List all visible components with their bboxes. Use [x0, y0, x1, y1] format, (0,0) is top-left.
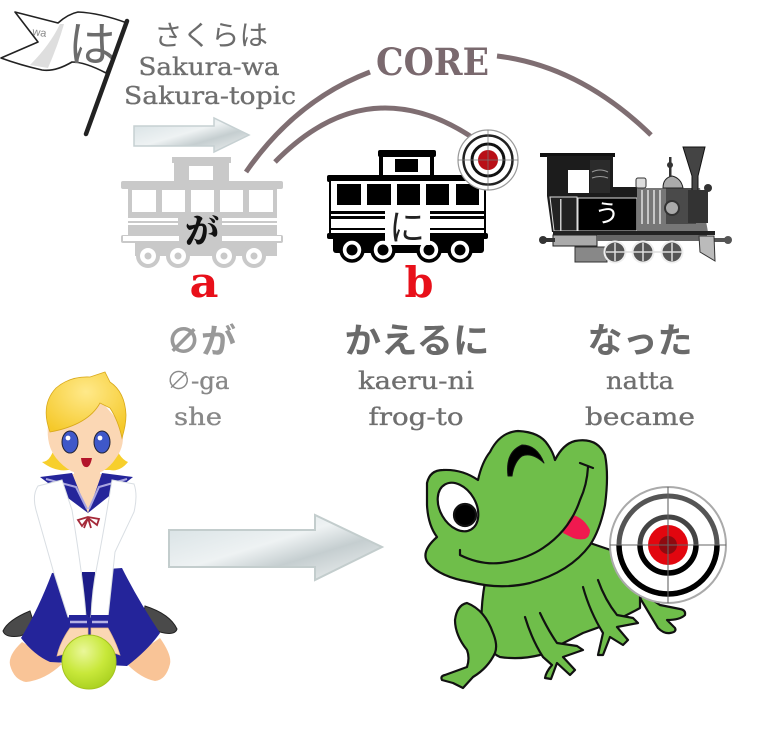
icon: wa topic flag — [1, 12, 127, 134]
frog far hand — [640, 595, 685, 633]
text: became gloss: なった — [588, 322, 692, 361]
right arm — [91, 480, 136, 617]
icon: black train car b — [327, 150, 488, 261]
icon: small target — [458, 130, 518, 190]
neck — [74, 465, 100, 480]
text: frog-to gloss: kaeru-ni — [358, 367, 474, 395]
text: became gloss: natta — [606, 367, 674, 395]
frog front arm — [525, 613, 583, 679]
legs — [10, 642, 62, 682]
icon: large target — [610, 487, 726, 603]
skirt — [21, 568, 160, 666]
icon: steam locomotive — [539, 147, 732, 262]
hair back — [42, 440, 128, 470]
text: she gloss: she — [174, 403, 222, 431]
icon: black train car b: に — [389, 207, 425, 248]
core arcs — [246, 56, 651, 172]
text: she gloss — [166, 322, 236, 431]
hair — [46, 372, 126, 438]
eyes — [62, 431, 78, 453]
text: Sakura-wa gloss: さくらは — [154, 20, 268, 51]
ball — [62, 635, 116, 689]
frog brow — [508, 445, 544, 476]
arrow: small grey arrow — [134, 118, 249, 152]
text: frog-to gloss: frog-to — [368, 403, 464, 431]
text: frog-to gloss: かえるに — [344, 322, 490, 361]
icon: grey train car a — [121, 157, 283, 266]
face — [48, 400, 123, 475]
text: became gloss: became — [585, 403, 695, 431]
label: b: b — [404, 258, 434, 307]
frog tongue — [563, 515, 590, 539]
icon: wa topic flag: は — [68, 19, 116, 72]
shoes — [3, 611, 36, 636]
cuffs — [69, 615, 88, 629]
illustration: girl with ball — [3, 372, 177, 689]
text: became gloss — [585, 322, 695, 431]
label: a: a — [190, 258, 218, 307]
bow — [78, 517, 99, 528]
icon: wa topic flag: wa — [31, 26, 48, 40]
neck opening — [72, 474, 102, 514]
text: she gloss: ∅-ga — [166, 367, 230, 395]
frog body — [481, 543, 640, 658]
text: Sakura-wa gloss: Sakura-wa — [138, 53, 280, 81]
frog mouth — [460, 463, 593, 563]
heading: CORE: CORE — [376, 40, 489, 84]
icon: steam locomotive: う — [594, 200, 620, 228]
frog eye — [429, 475, 487, 539]
frog back leg — [441, 603, 496, 688]
hands — [57, 628, 88, 656]
torso — [60, 478, 116, 575]
illustration: frog — [425, 431, 685, 688]
text: Sakura-wa gloss: Sakura-topic — [124, 82, 296, 110]
arrow: large grey arrow — [169, 515, 382, 580]
frog second arm — [583, 580, 638, 655]
icon: grey train car a: が — [185, 214, 219, 251]
frog head — [425, 431, 607, 586]
left arm — [34, 480, 86, 617]
text: Sakura-wa gloss — [124, 20, 296, 110]
text: frog-to gloss — [344, 322, 490, 431]
collar — [40, 473, 88, 513]
text: she gloss: ∅が — [166, 322, 236, 361]
